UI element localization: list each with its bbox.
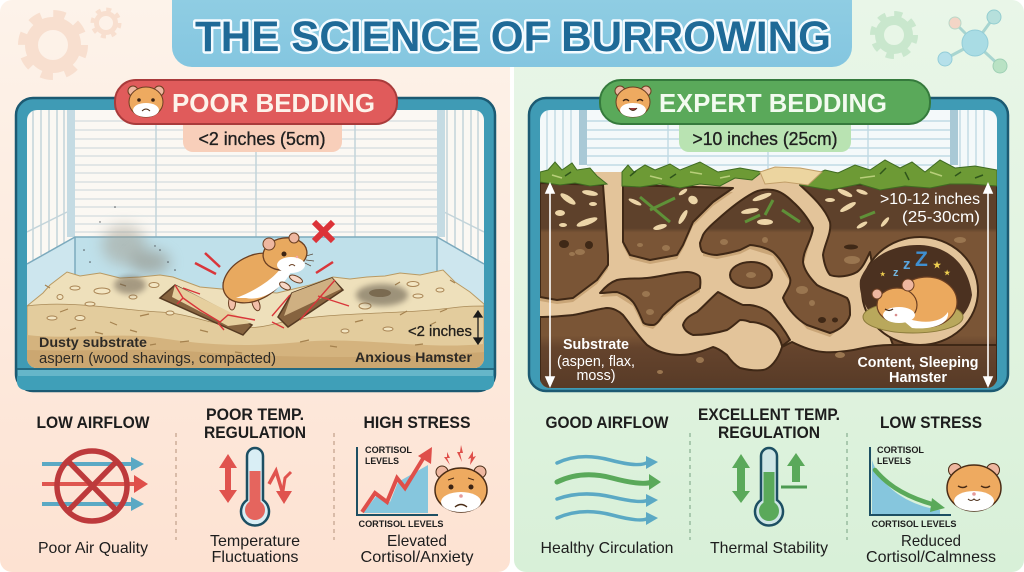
- caption: Poor Air Quality: [38, 540, 148, 557]
- cage tray: [17, 369, 494, 390]
- heading: [204, 406, 306, 442]
- caption: Cortisol/Anxiety: [360, 549, 474, 566]
- icon: happy hamster face: [615, 86, 651, 117]
- panel: poor temperature regulation: [204, 406, 306, 566]
- label: content sleeping hamster: Content, Sleeping: [858, 355, 978, 371]
- icon: sad hamster face: [128, 86, 164, 117]
- caption: Temperature: [210, 533, 300, 550]
- sleeping z letters: ★: [880, 271, 886, 278]
- heading: REGULATION: [204, 424, 306, 442]
- icon: green gear: [873, 14, 915, 56]
- heading: HIGH STRESS: [364, 414, 470, 432]
- dust cloud: [83, 206, 176, 274]
- label: 25-30cm: (25-30cm): [902, 209, 980, 226]
- caption: [210, 533, 300, 566]
- label: anxious hamster: Anxious Hamster: [355, 350, 472, 366]
- heading text: EXPERT BEDDING: [659, 88, 887, 118]
- stress marks: [195, 253, 333, 274]
- heading: LOW STRESS: [880, 414, 982, 432]
- chart: falling cortisol: [870, 445, 956, 530]
- icon: wavy airflow arrows: [557, 456, 661, 525]
- sleeping z letters: ★: [933, 260, 942, 270]
- panel: poor bedding cage: [16, 98, 495, 391]
- chart: falling cortisol: LEVELS: [877, 456, 911, 467]
- caption: Fluctuations: [212, 549, 298, 566]
- cage interior: [27, 110, 484, 370]
- title: THE SCIENCE OF BURROWING: [195, 13, 831, 61]
- soil shadows: [540, 187, 850, 337]
- panel: excellent temperature regulation: [698, 406, 840, 557]
- icon: green thermometer: [732, 448, 807, 525]
- heading: POOR TEMP.: [206, 406, 304, 424]
- chart: falling cortisol: CORTISOL LEVELS: [872, 519, 956, 530]
- dividers green: [690, 433, 847, 540]
- caption: [360, 533, 474, 566]
- panel: expert bedding background: [514, 0, 1024, 572]
- label: content sleeping hamster: [858, 355, 978, 386]
- heading badge: poor bedding: [115, 80, 397, 124]
- chart: rising cortisol: CORTISOL LEVELS: [358, 519, 444, 530]
- caption: [866, 533, 996, 566]
- tag: greater than 10 inches: [679, 120, 851, 152]
- caption: Reduced: [901, 533, 961, 550]
- panel: low airflow: [36, 414, 150, 557]
- label: content sleeping hamster: Hamster: [889, 370, 947, 386]
- depth arrows: [546, 184, 992, 386]
- panel: high stress: [357, 414, 487, 566]
- chart: rising cortisol: [357, 445, 444, 530]
- panel: good airflow: [540, 414, 674, 557]
- label: aspern: aspern (wood shavings, compacted): [39, 351, 276, 367]
- chart: falling cortisol: CORTISOL: [877, 445, 924, 456]
- panel: poor bedding background: [0, 0, 510, 572]
- icon: stressed hamster: [435, 445, 487, 512]
- heading: REGULATION: [718, 424, 820, 442]
- sleeping z letters: ★: [944, 269, 951, 277]
- caption: Elevated: [387, 533, 447, 550]
- depth arrow: [474, 311, 482, 344]
- label: less than 2 inches: <2 inches: [408, 324, 472, 340]
- dark smudges: [114, 276, 408, 306]
- icon: orange gears: [22, 10, 120, 76]
- heading: EXCELLENT TEMP.: [698, 406, 840, 424]
- caption: Thermal Stability: [710, 540, 828, 557]
- anxious hamster: [215, 233, 314, 313]
- caption: Healthy Circulation: [540, 540, 674, 557]
- tunnel base: [540, 172, 997, 388]
- heading badge: expert bedding: [600, 80, 930, 124]
- tag: less than 2 inches: <2 inches (5cm): [198, 129, 326, 149]
- chart: rising cortisol: CORTISOL: [365, 445, 412, 456]
- burrow cross-section: [540, 110, 997, 390]
- heading text: POOR BEDDING: [172, 88, 375, 118]
- moss surface: [540, 160, 997, 190]
- label: dusty substrate: Dusty substrate: [39, 334, 147, 350]
- soil islands: [540, 183, 997, 390]
- caption: Cortisol/Calmness: [866, 549, 996, 566]
- label: substrate: Substrate: [563, 337, 629, 353]
- bedding layers: [27, 270, 484, 370]
- tag: less than 2 inches: [183, 120, 342, 152]
- label: substrate: moss): [576, 368, 616, 384]
- dividers: [176, 433, 334, 540]
- heading: [698, 406, 840, 442]
- sleeping den: [860, 237, 978, 345]
- broken boards: [160, 278, 349, 335]
- icon: blocked airflow: [42, 451, 148, 521]
- sleeping z letters: z: [893, 267, 899, 279]
- wood chips: [47, 282, 444, 333]
- tag: greater than 10 inches: >10 inches (25cm): [692, 129, 838, 149]
- icon: molecule: [938, 10, 1007, 73]
- heading: GOOD AIRFLOW: [546, 414, 669, 432]
- icon: calm hamster: [947, 464, 1001, 511]
- label: substrate: (aspen, flax,: [557, 354, 635, 370]
- red x: [314, 222, 333, 241]
- panel: expert bedding cage: [529, 98, 1008, 391]
- label: 10-12 inches: >10-12 inches: [880, 191, 980, 208]
- icon: red thermometer: [219, 448, 292, 525]
- sleeping z letters: [880, 252, 950, 276]
- sleeping z letters: z: [903, 256, 910, 273]
- panel: low stress: [866, 414, 1001, 566]
- sleeping z letters: Z: [915, 248, 928, 271]
- heading: LOW AIRFLOW: [36, 414, 150, 432]
- wood chips and moss bits: [555, 187, 966, 374]
- title banner: [172, 0, 852, 67]
- label: substrate: [557, 337, 635, 384]
- chart: rising cortisol: LEVELS: [365, 456, 399, 467]
